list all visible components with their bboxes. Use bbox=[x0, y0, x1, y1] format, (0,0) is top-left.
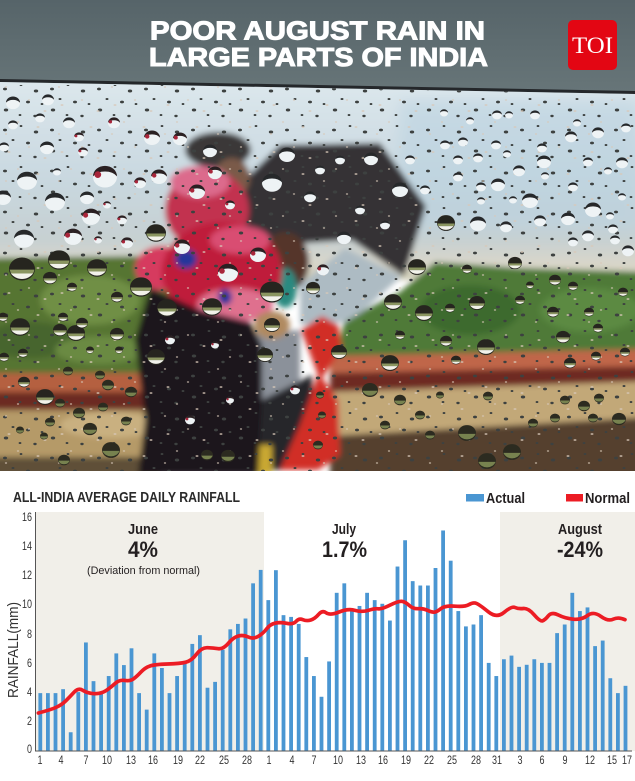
annotation: July: 1.7% bbox=[322, 537, 367, 562]
ground bands bbox=[0, 373, 160, 393]
y axis labels: 8 bbox=[27, 629, 32, 641]
x axis labels: 6 bbox=[540, 755, 544, 767]
title: LARGE PARTS OF INDIA bbox=[149, 42, 488, 72]
x axis labels: 4 bbox=[58, 755, 64, 767]
x axis labels: 28 bbox=[242, 755, 252, 767]
y axis labels: 0 bbox=[27, 744, 32, 756]
x axis labels: 22 bbox=[424, 755, 434, 767]
droplets over child and greenery bbox=[0, 166, 628, 361]
large droplets on sky bbox=[0, 94, 634, 256]
chart heading: ALL-INDIA AVERAGE DAILY RAINFALL bbox=[13, 489, 240, 506]
legend bbox=[466, 490, 630, 507]
annotation: August: -24% bbox=[557, 537, 603, 562]
x axis labels: 25 bbox=[219, 755, 229, 767]
child in pink bbox=[165, 170, 249, 250]
adult black coat bbox=[135, 288, 262, 475]
second person and kid bbox=[255, 326, 304, 402]
annotation: August: August bbox=[558, 521, 602, 538]
x axis labels: 25 bbox=[447, 755, 457, 767]
x axis labels: 17 bbox=[622, 755, 632, 767]
adult hood and face bbox=[185, 132, 251, 168]
x axis labels bbox=[38, 755, 632, 767]
x axis labels: 15 bbox=[607, 755, 617, 767]
blurred scene behind glass bbox=[0, 75, 635, 480]
annotation: July bbox=[322, 521, 367, 562]
annotation: June bbox=[87, 521, 200, 577]
annotation: June: 4% bbox=[128, 537, 158, 562]
y axis title: RAINFALL(mm) bbox=[5, 602, 22, 698]
x axis labels: 10 bbox=[333, 755, 343, 767]
x axis labels: 12 bbox=[585, 755, 595, 767]
x axis labels: 19 bbox=[401, 755, 411, 767]
annotation: August bbox=[557, 521, 603, 562]
y axis labels: 16 bbox=[22, 512, 32, 524]
x axis labels: 19 bbox=[173, 755, 183, 767]
y axis labels: 12 bbox=[22, 570, 32, 582]
title bbox=[149, 16, 488, 72]
x axis labels: 13 bbox=[356, 755, 366, 767]
x axis labels: 13 bbox=[126, 755, 136, 767]
bars: actual rainfall bbox=[38, 530, 627, 750]
axes bbox=[36, 512, 632, 751]
x axis labels: 7 bbox=[84, 755, 88, 767]
droplet texture bbox=[0, 85, 635, 471]
chart: all-India average daily rainfall bbox=[5, 512, 635, 767]
umbrella bbox=[232, 143, 426, 276]
x axis labels: 28 bbox=[471, 755, 481, 767]
y axis labels: 14 bbox=[22, 541, 32, 553]
y axis labels bbox=[22, 512, 32, 756]
x axis labels: 10 bbox=[102, 755, 112, 767]
annotation: June: (Deviation from normal) bbox=[87, 565, 200, 577]
greenery right bbox=[335, 262, 635, 356]
x axis labels: 16 bbox=[148, 755, 158, 767]
y axis labels: 6 bbox=[27, 658, 32, 670]
y axis labels: 2 bbox=[27, 716, 32, 728]
dark window frame band bbox=[0, 0, 635, 96]
title: POOR AUGUST RAIN IN bbox=[150, 16, 485, 46]
annotation: July: July bbox=[332, 521, 357, 538]
y axis labels: 4 bbox=[27, 687, 32, 699]
icon: TOI logo: TOI bbox=[572, 33, 613, 58]
x axis labels: 4 bbox=[290, 755, 295, 767]
legend: Actual bbox=[486, 490, 525, 507]
x axis labels: 1 bbox=[38, 755, 42, 767]
greenery left bbox=[0, 256, 175, 378]
x axis labels: 22 bbox=[195, 755, 205, 767]
x axis labels: 9 bbox=[562, 755, 568, 767]
x axis labels: 7 bbox=[312, 755, 316, 767]
y axis labels: 10 bbox=[22, 599, 32, 611]
droplets over ground and coat bbox=[16, 335, 630, 469]
x axis labels: 31 bbox=[492, 755, 502, 767]
line: normal rainfall bbox=[38, 601, 625, 713]
photo: rain on window bbox=[0, 0, 635, 480]
icon: TOI logo bbox=[568, 20, 617, 70]
x axis labels: 16 bbox=[378, 755, 388, 767]
annotation: June: June bbox=[128, 521, 158, 538]
x axis labels: 3 bbox=[518, 755, 522, 767]
month background panels bbox=[36, 512, 635, 751]
x axis labels: 1 bbox=[266, 755, 272, 767]
